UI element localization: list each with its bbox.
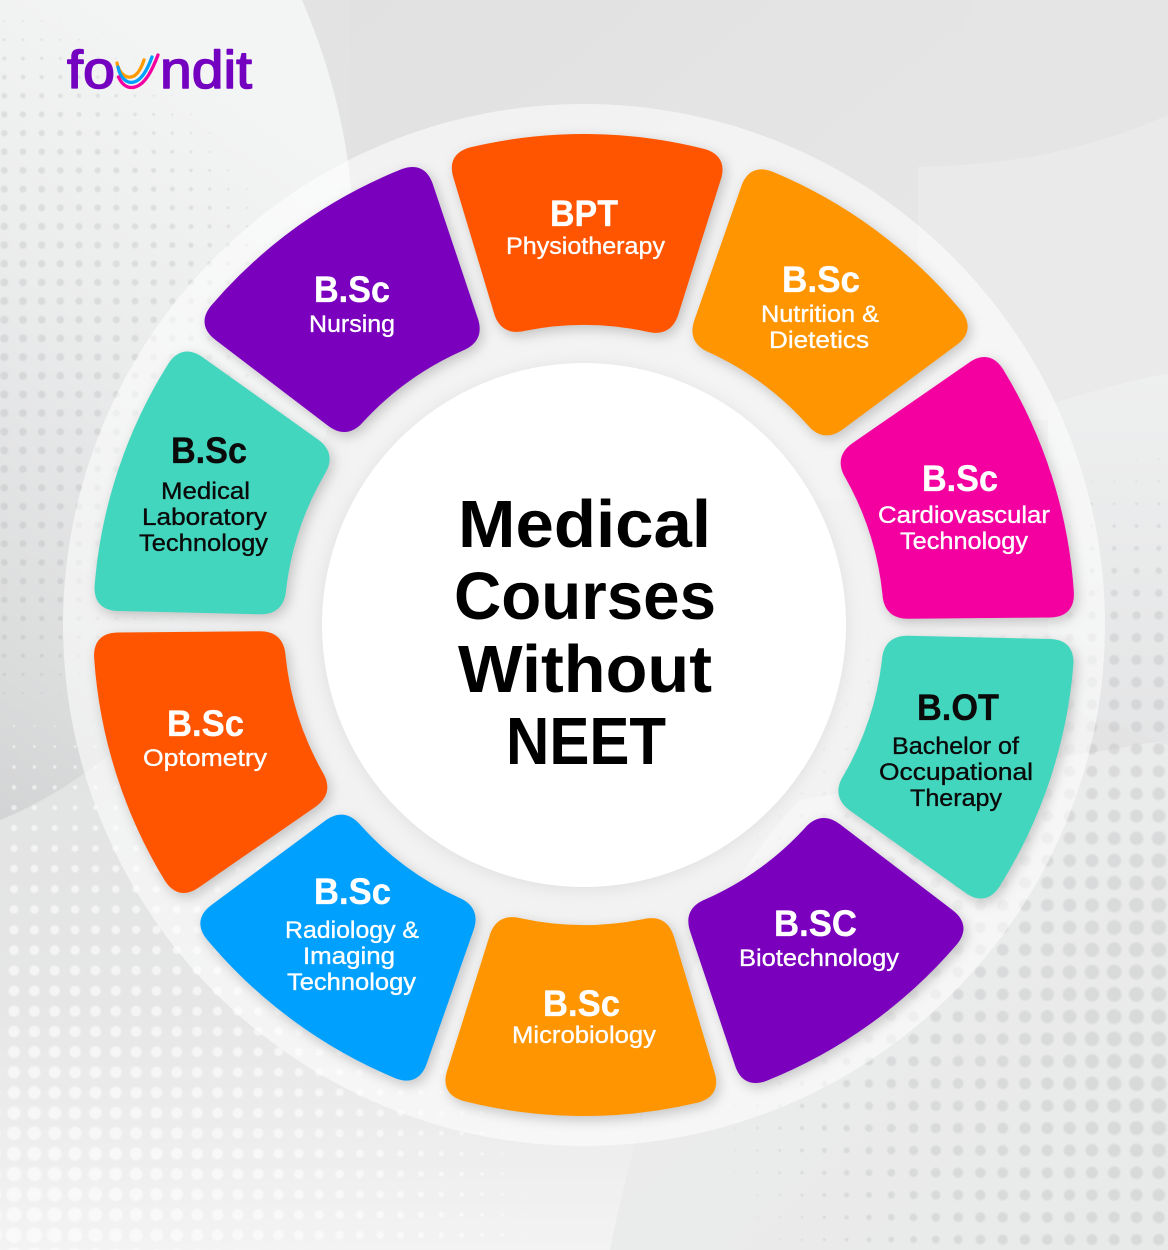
panel: B.Sc Medical Laboratory Technology: Laboratory — [142, 504, 267, 531]
panel: B.Sc Optometry: B.Sc — [167, 703, 244, 744]
panel: B.Sc Medical Laboratory Technology: B.Sc — [171, 430, 247, 471]
panel: B.Sc Nursing: Nursing — [309, 311, 395, 338]
logo: foundit: ndit — [160, 41, 252, 100]
panel: B.Sc Radiology and Imaging Technology: Radiology & — [285, 917, 419, 944]
panel: B.Sc Microbiology — [445, 917, 717, 1117]
panel: B.Sc Nutrition and Dietetics: Dietetics — [769, 327, 869, 354]
panel: B.Sc Nursing — [188, 147, 524, 466]
panel: B.Sc Microbiology: B.Sc — [543, 983, 620, 1024]
panel: B.Sc Cardiovascular Technology: B.Sc — [922, 458, 998, 499]
panel: B.Sc Radiology and Imaging Technology — [184, 780, 519, 1100]
dots: bottom right halftone — [680, 420, 1168, 1250]
panel: B.Sc Radiology and Imaging Technology: Technology — [287, 969, 416, 996]
panel: B.Sc Medical Laboratory Technology — [75, 342, 349, 661]
dots: top left halftone — [0, 20, 266, 694]
panel: B.Sc Medical Laboratory Technology: Technology — [139, 530, 268, 557]
panel: B.Sc Radiology and Imaging Technology: B.Sc — [314, 871, 391, 912]
panel: B.Sc Nutrition and Dietetics: B.Sc — [782, 259, 860, 300]
panel: B.OT Bachelor of Occupational Therapy: Therapy — [910, 785, 1002, 812]
panel: B.Sc Microbiology: Microbiology — [512, 1022, 656, 1049]
logo: foundit: fo — [67, 41, 115, 100]
panel: B.SC Biotechnology — [644, 784, 980, 1103]
title: Medical — [458, 487, 711, 562]
icon: logo u arcs — [117, 55, 158, 88]
panel: BPT Physiotherapy: BPT — [550, 193, 618, 234]
panel: B.Sc Nursing: B.Sc — [314, 269, 390, 310]
center disc — [322, 363, 846, 887]
panel: B.OT Bachelor of Occupational Therapy — [819, 589, 1093, 908]
panel: B.OT Bachelor of Occupational Therapy: B.OT — [917, 687, 999, 728]
panel: B.OT Bachelor of Occupational Therapy: Bachelor of — [892, 733, 1019, 760]
panel: B.Sc Cardiovascular Technology: Cardiovascular — [878, 502, 1050, 529]
panel: B.SC Biotechnology: B.SC — [774, 903, 857, 944]
panel: B.Sc Nutrition and Dietetics — [649, 150, 984, 470]
panel: B.Sc Radiology and Imaging Technology: Imaging — [303, 943, 395, 970]
panel: BPT Physiotherapy — [451, 133, 723, 333]
panel: B.Sc Optometry — [75, 584, 346, 902]
panel: B.SC Biotechnology: Biotechnology — [739, 945, 899, 972]
logo: foundit — [67, 41, 252, 100]
title — [454, 487, 716, 779]
panel: B.Sc Medical Laboratory Technology: Medical — [161, 478, 250, 505]
title: Courses — [454, 559, 716, 634]
panel: BPT Physiotherapy: Physiotherapy — [506, 233, 665, 260]
title: NEET — [506, 704, 666, 779]
panel: B.Sc Nutrition and Dietetics: Nutrition & — [761, 301, 879, 328]
panel: B.Sc Cardiovascular Technology: Technology — [900, 528, 1028, 555]
panel: B.Sc Cardiovascular Technology — [822, 348, 1093, 666]
outer translucent ring — [63, 104, 1105, 1146]
panel: B.OT Bachelor of Occupational Therapy: Occupational — [879, 759, 1033, 786]
title: Without — [458, 632, 712, 707]
dots: bottom left halftone — [0, 690, 600, 1250]
panel: B.Sc Optometry: Optometry — [143, 745, 267, 772]
